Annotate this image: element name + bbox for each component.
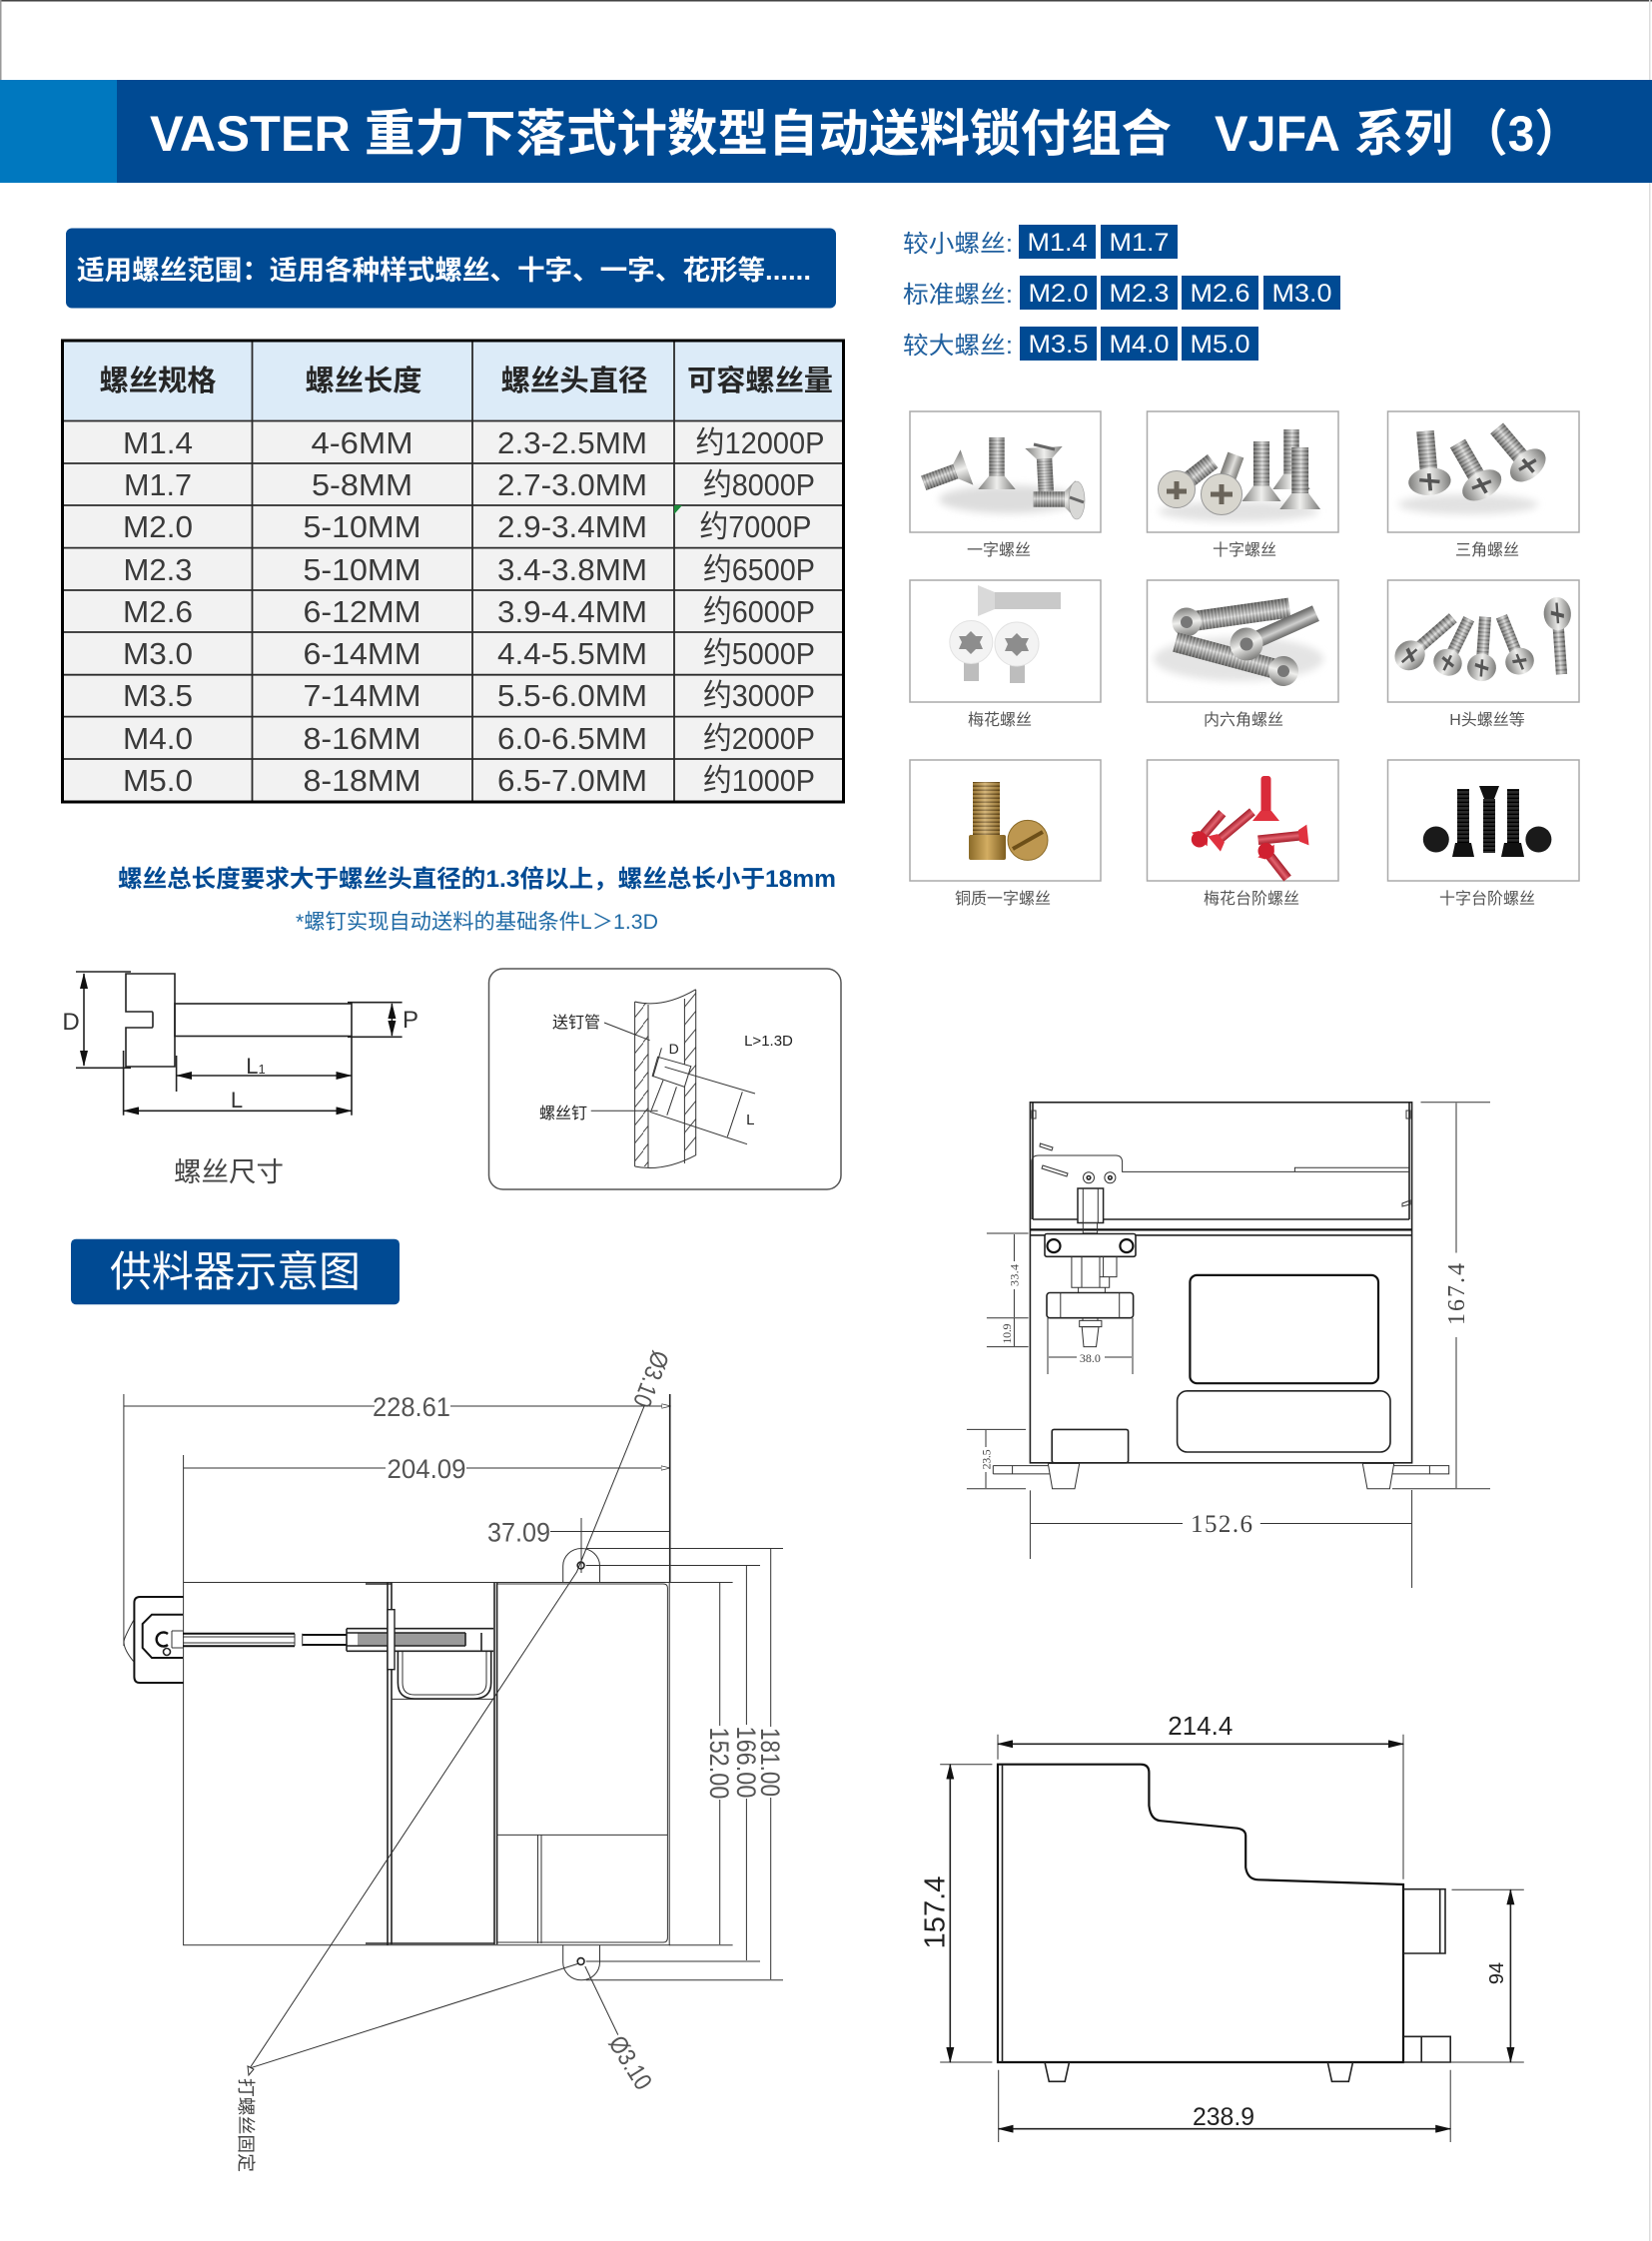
larger screws row: M3.5 bbox=[1029, 331, 1089, 359]
dimension: 157.4: 157.4 bbox=[919, 1876, 951, 1948]
table header: 螺丝规格 bbox=[100, 365, 216, 397]
applicable screw range banner bbox=[66, 228, 836, 308]
screw dimension diagram bbox=[62, 972, 418, 1187]
table rows: 4-6MM bbox=[312, 425, 413, 460]
front hex screw bbox=[1225, 598, 1322, 666]
title banner: VASTER bbox=[150, 106, 351, 162]
lower hex screw bbox=[1172, 628, 1301, 689]
photo: brass slotted screw bbox=[910, 760, 1101, 908]
screw size categories bbox=[903, 225, 1340, 361]
table rows: M3.0 bbox=[123, 636, 193, 671]
standard screws row bbox=[903, 276, 1340, 310]
photo: red torx step screws: 梅花台阶螺丝 bbox=[1204, 890, 1299, 908]
dispensing head bbox=[1045, 1188, 1136, 1347]
photo: torx screws: 梅花螺丝 bbox=[968, 711, 1032, 729]
callout: hole diameter bottom: Ø3.10 bbox=[603, 2031, 657, 2095]
screw specification table bbox=[62, 341, 844, 802]
feed tube diagram panel: D bbox=[669, 1041, 679, 1057]
table rows: 3.4-3.8MM bbox=[497, 552, 647, 587]
caption: screw size: 螺丝尺寸 bbox=[174, 1157, 284, 1187]
leader: screw fixing bbox=[236, 1405, 645, 2172]
dimension: 238.9: 238.9 bbox=[1193, 2103, 1254, 2131]
dimension: 166.00 bbox=[586, 1566, 761, 1961]
table rows bbox=[123, 425, 825, 798]
table rows: 5.5-6.0MM bbox=[497, 678, 647, 713]
table rows: 约8000P bbox=[703, 467, 815, 502]
table rows: M1.4 bbox=[123, 425, 193, 460]
photo: black Phillips step screws bbox=[1388, 760, 1579, 908]
dimension: 228.61 bbox=[124, 1392, 671, 1646]
table rows: 约1000P bbox=[703, 763, 815, 798]
dimension: 204.09: 204.09 bbox=[388, 1454, 465, 1484]
dimension: 238.9 bbox=[999, 2070, 1450, 2142]
screw dimension diagram: L1 bbox=[246, 1054, 266, 1079]
side view drawing bbox=[919, 1711, 1524, 2142]
table rows: 约6500P bbox=[703, 552, 815, 587]
larger screws row: 较大螺丝: bbox=[903, 333, 1013, 360]
front view drawing bbox=[967, 1103, 1490, 1588]
mounting ears bbox=[563, 1548, 599, 1980]
photo: H-head screws: H头螺丝等 bbox=[1449, 711, 1525, 729]
standard screws row: M2.0 bbox=[1029, 280, 1089, 308]
dimension: 152.6 bbox=[1030, 1490, 1412, 1588]
table header: 可容螺丝量 bbox=[687, 365, 833, 397]
table rows: 约3000P bbox=[703, 678, 815, 713]
table rows: 5-10MM bbox=[304, 509, 421, 544]
larger screws row: M5.0 bbox=[1191, 331, 1250, 359]
dimension: 33.4: 33.4 bbox=[1007, 1264, 1021, 1286]
title banner bbox=[0, 80, 1652, 183]
side profile bbox=[998, 1765, 1450, 2081]
photo: hex socket screws: 内六角螺丝 bbox=[1204, 711, 1283, 729]
heading: feeder schematic bbox=[71, 1239, 400, 1304]
callout: hole diameter bottom bbox=[585, 1966, 657, 2095]
dimension: 10.9 bbox=[987, 1318, 1029, 1347]
table rows: 6.5-7.0MM bbox=[497, 763, 647, 798]
table rows: 6-14MM bbox=[304, 636, 421, 671]
upper hex screw bbox=[1171, 593, 1291, 638]
dimension: 167.4 bbox=[1392, 1103, 1490, 1489]
dimension: 167.4: 167.4 bbox=[1444, 1263, 1470, 1325]
dimension: 214.4: 214.4 bbox=[1168, 1711, 1233, 1741]
screw length requirement note bbox=[118, 865, 836, 934]
table rows: 约5000P bbox=[703, 636, 815, 671]
table rows: M4.0 bbox=[123, 721, 193, 756]
dimension: 181.00: 181.00 bbox=[755, 1728, 785, 1797]
dimension: 38.0: 38.0 bbox=[1080, 1351, 1101, 1365]
smaller screws row: M1.7 bbox=[1109, 229, 1169, 257]
table rows: M2.6 bbox=[123, 594, 193, 629]
applicable screw range banner: 适用螺丝范围：适用各种样式螺丝、十字、一字、花形等...... bbox=[77, 256, 811, 286]
feed rail mechanism bbox=[124, 1597, 493, 1683]
dimension: 214.4 bbox=[998, 1711, 1403, 1879]
table rows: 5-10MM bbox=[304, 552, 421, 587]
screw dimension diagram: P bbox=[403, 1007, 418, 1034]
table rows: 5-8MM bbox=[312, 467, 413, 502]
screw length requirement note: 螺丝总长度要求大于螺丝头直径的1.3倍以上，螺丝总长小于18mm bbox=[118, 865, 836, 893]
photo: triangle screws: 三角螺丝 bbox=[1455, 541, 1519, 559]
dimension: 152.6: 152.6 bbox=[1191, 1511, 1252, 1538]
smaller screws row: 较小螺丝: bbox=[903, 231, 1013, 258]
title banner: 重力下落式计数型自动送料锁付组合 bbox=[365, 106, 1172, 162]
dimension: 23.5: 23.5 bbox=[979, 1449, 993, 1469]
lower control panel bbox=[1178, 1391, 1390, 1452]
photo: triangle screws bbox=[1388, 411, 1579, 559]
leader: screw fixing: 打螺丝固定 bbox=[236, 2078, 256, 2172]
table rows: 约6000P bbox=[703, 594, 815, 629]
dimension: 37.09: 37.09 bbox=[487, 1518, 550, 1548]
table rows: 约12000P bbox=[695, 425, 825, 460]
table rows: M5.0 bbox=[123, 763, 193, 798]
dimension: 228.61: 228.61 bbox=[373, 1392, 450, 1422]
title banner: 系列 bbox=[1354, 106, 1453, 162]
dimension: 94 bbox=[1450, 1889, 1524, 2062]
dimension: 38.0 bbox=[1048, 1318, 1133, 1374]
photo: hex socket screws bbox=[1147, 580, 1338, 729]
photo: red torx step screws bbox=[1147, 760, 1338, 908]
standard screws row: M2.3 bbox=[1109, 280, 1169, 308]
photo: slotted screws: 一字螺丝 bbox=[967, 541, 1031, 559]
leader: screw bbox=[539, 1105, 658, 1122]
table rows: 2.3-2.5MM bbox=[497, 425, 647, 460]
smaller screws row bbox=[903, 225, 1178, 259]
display screen bbox=[1190, 1275, 1378, 1383]
dimension: 166.00: 166.00 bbox=[731, 1726, 761, 1798]
table rows: M1.7 bbox=[124, 467, 192, 502]
table rows: 7-14MM bbox=[304, 678, 421, 713]
standard screws row: 标准螺丝: bbox=[903, 282, 1013, 309]
dimension: 33.4 bbox=[987, 1233, 1029, 1318]
leader: feed tube: 送钉管 bbox=[552, 1014, 600, 1032]
title banner: VJFA bbox=[1215, 106, 1340, 162]
table rows: 2.9-3.4MM bbox=[497, 509, 647, 544]
table header: 螺丝长度 bbox=[306, 365, 421, 397]
table rows: 3.9-4.4MM bbox=[497, 594, 647, 629]
screw dimension diagram: L bbox=[231, 1088, 243, 1113]
base, feet and flanges bbox=[993, 1429, 1449, 1489]
dimension: 157.4 bbox=[919, 1765, 992, 2062]
callout: hole diameter top: Ø3.10 bbox=[627, 1347, 674, 1411]
dimension: 152.00 bbox=[669, 1582, 734, 1945]
screw length requirement note: *螺钉实现自动送料的基础条件L＞1.3D bbox=[296, 911, 658, 934]
photo: Phillips screws bbox=[1147, 411, 1338, 559]
standard screws row: M3.0 bbox=[1272, 280, 1332, 308]
table rows: M2.3 bbox=[124, 552, 192, 587]
table header bbox=[100, 365, 833, 397]
photo: Phillips screws: 十字螺丝 bbox=[1213, 541, 1276, 559]
dimension: 23.5 bbox=[967, 1429, 1026, 1489]
enclosure bbox=[1030, 1103, 1412, 1463]
larger screws row bbox=[903, 327, 1258, 361]
table header: 螺丝头直径 bbox=[501, 365, 647, 397]
larger screws row: M4.0 bbox=[1109, 331, 1169, 359]
table rows: 约2000P bbox=[703, 721, 815, 756]
title banner: （3） bbox=[1460, 106, 1582, 162]
table rows: 8-16MM bbox=[304, 721, 421, 756]
photo: brass slotted screw: 铜质一字螺丝 bbox=[955, 890, 1051, 908]
table rows: M3.5 bbox=[123, 678, 193, 713]
leader: feed tube bbox=[552, 1014, 650, 1041]
table rows: 8-18MM bbox=[304, 763, 421, 798]
photo: black Phillips step screws: 十字台阶螺丝 bbox=[1439, 890, 1535, 908]
standard screws row: M2.6 bbox=[1191, 280, 1250, 308]
table rows: 2.7-3.0MM bbox=[497, 467, 647, 502]
feeder body outline bbox=[184, 1582, 669, 1945]
feed tube diagram panel: L bbox=[746, 1112, 754, 1128]
photo: slotted screws bbox=[910, 411, 1101, 559]
dimension: 152.00: 152.00 bbox=[704, 1728, 734, 1800]
table rows: 4.4-5.5MM bbox=[497, 636, 647, 671]
table rows: 约7000P bbox=[699, 509, 811, 544]
table rows: 6.0-6.5MM bbox=[497, 721, 647, 756]
table rows: M2.0 bbox=[123, 509, 193, 544]
dimension: 94: 94 bbox=[1486, 1962, 1508, 1984]
top view drawing bbox=[124, 1347, 785, 2172]
smaller screws row: M1.4 bbox=[1027, 229, 1088, 257]
screw dimension diagram: D bbox=[62, 1009, 80, 1036]
dimension: 181.00 bbox=[586, 1548, 785, 1980]
dimension: 37.09 bbox=[487, 1394, 670, 1582]
photo: H-head screws bbox=[1388, 580, 1579, 729]
table rows: 6-12MM bbox=[304, 594, 421, 629]
feed tube diagram panel bbox=[489, 969, 841, 1189]
heading: feeder schematic: 供料器示意图 bbox=[110, 1248, 361, 1295]
photo: torx screws bbox=[910, 580, 1101, 729]
leader: screw: 螺丝钉 bbox=[539, 1105, 587, 1122]
feed tube diagram panel: L>1.3D bbox=[744, 1033, 793, 1050]
dimension: 204.09 bbox=[184, 1454, 670, 1582]
dimension: 10.9: 10.9 bbox=[1000, 1324, 1014, 1344]
